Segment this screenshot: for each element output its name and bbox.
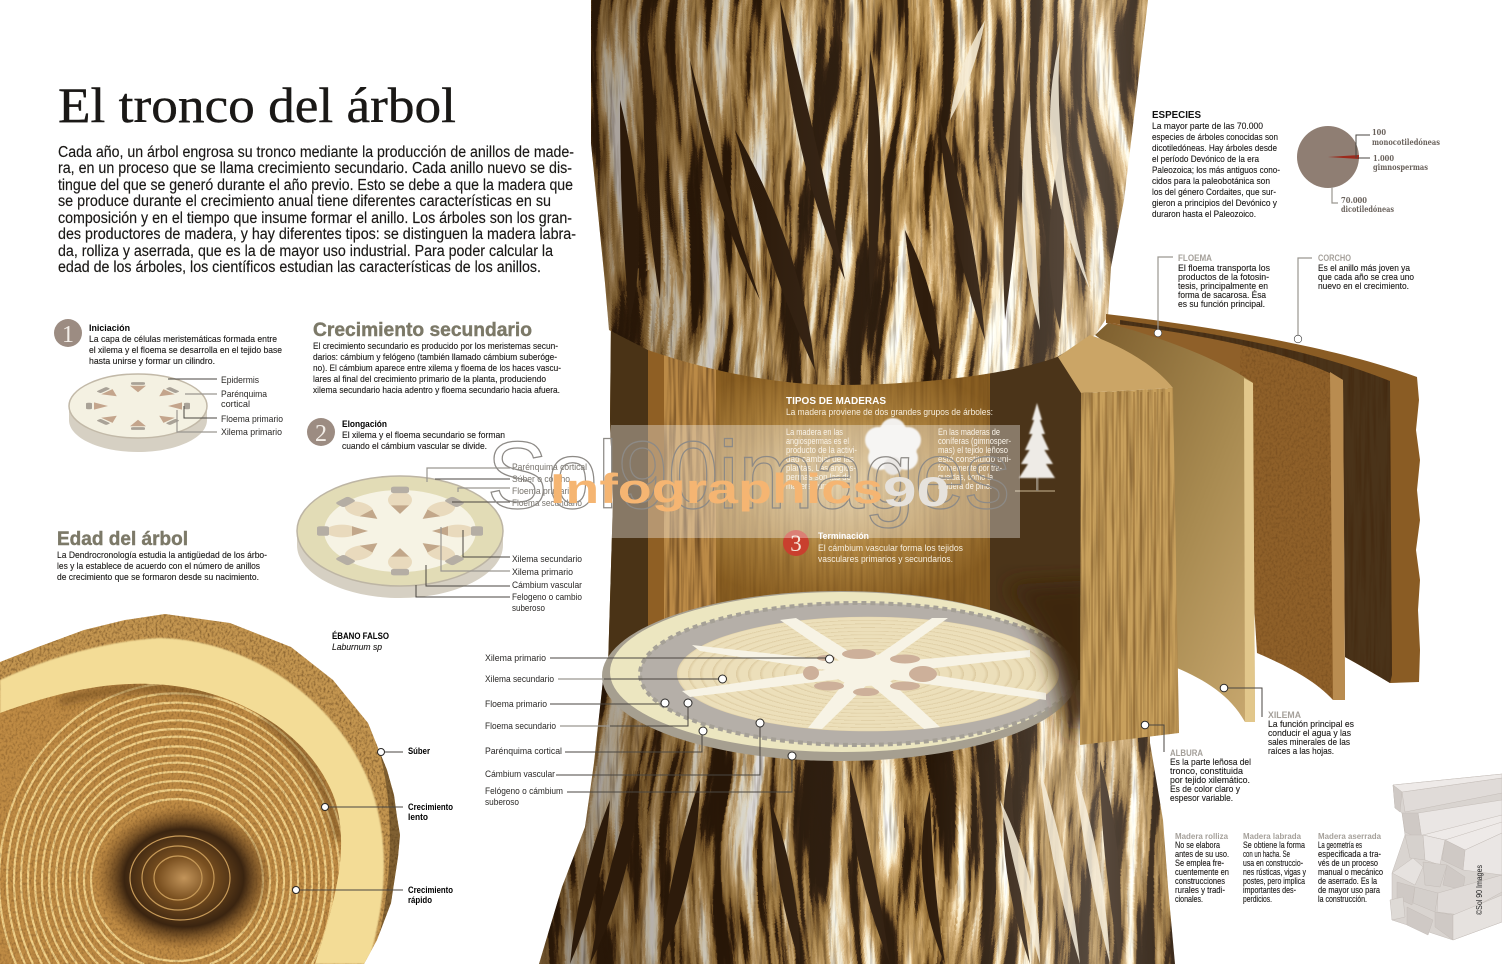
madera aserrada: de aserrado. Es la (1318, 876, 1377, 886)
callout: cámbium vascular (485, 719, 764, 780)
body text: El crecimiento secundario es producido por los meristemas secun- (313, 341, 558, 352)
callout: floema: es su función principal. (1178, 299, 1265, 310)
body text: de crecimiento que se formaron desde su nacimiento. (57, 572, 259, 583)
body text: La Dendrocronología estudia la antigüedad de los árbo- (57, 550, 267, 561)
callout: felógeno: Felógeno o cámbium (485, 786, 563, 797)
callout: albura: ALBURA (1170, 748, 1203, 759)
pie chart: gimnospermas (1373, 163, 1428, 173)
madera aserrada: especificada a tra- (1318, 849, 1381, 859)
callout: súber (378, 746, 430, 756)
madera rolliza: rurales y tradi- (1175, 885, 1225, 895)
label: ébano falso: Laburnum sp (332, 642, 382, 653)
step 3 text: Terminación (818, 531, 869, 541)
callout: albura (1141, 721, 1251, 804)
labels disc 2: suberoso (512, 603, 545, 614)
pie chart: 70.000 (1341, 196, 1367, 206)
label: ébano falso: ÉBANO FALSO (332, 631, 389, 641)
icon: timber stack (1390, 774, 1502, 940)
cut wall of trunk (608, 330, 1090, 680)
body text: Paleozoica; los más antiguos cono- (1152, 165, 1280, 176)
labels disc 1: Parénquima (221, 389, 268, 400)
angiospermas text (786, 427, 857, 491)
heading: Crecimiento secundario (313, 320, 532, 341)
callout: albura: por tejido xilemático. (1170, 775, 1250, 786)
labels disc 1: Epidermis (221, 375, 259, 386)
step 2 text: El xilema y el floema secundario se forman (342, 430, 505, 441)
body text (1152, 121, 1280, 220)
madera rolliza: Se emplea fre- (1175, 858, 1224, 868)
section: edad del árbol (57, 529, 267, 583)
diagram: disc 2 (297, 476, 503, 598)
callout: xilema: XILEMA (1268, 710, 1301, 721)
floema layer (1108, 323, 1345, 700)
coníferas text: formemente por tra- (938, 463, 1002, 473)
xilema layer (1095, 323, 1255, 722)
especies block (1152, 109, 1440, 220)
callout: xilema secundario (485, 674, 726, 685)
madera rolliza: construcciones (1175, 876, 1226, 886)
number badge 1: 1 (62, 322, 74, 348)
step 2: elongación (297, 418, 587, 614)
heartwood (96, 806, 272, 950)
callout: floema primario (485, 699, 669, 710)
callout: xilema: raíces a las hojas. (1268, 746, 1334, 757)
pie chart: dicotiledóneas (1341, 204, 1394, 215)
callout: floema: tesis, principalmente en (1178, 281, 1268, 292)
watermark: sol 90 images: Sol90images (487, 422, 1010, 529)
madera labrada: Madera labrada (1243, 831, 1301, 841)
madera aserrada: la construcción. (1318, 894, 1367, 904)
madera rolliza: antes de su uso. (1175, 849, 1229, 859)
intro text: da, rolliza y aserrada, que es la de mayor uso industrial. Para poder calcular la (58, 243, 553, 260)
watermark: infographics: Infographics (550, 465, 883, 512)
angiospermas text: angiospermas es el (786, 436, 849, 446)
labels disc 2: Xilema secundario (512, 554, 582, 565)
body text: xilema secundario hacia adentro y floema secundario hacia afuera. (313, 385, 560, 396)
copyright: ©Sol 90 Images (1474, 865, 1484, 915)
intro text (58, 144, 576, 276)
albura layer (1058, 335, 1180, 750)
label: ébano falso (332, 631, 389, 653)
madera labrada: perdicios. (1243, 894, 1272, 904)
callout: xilema (1220, 684, 1354, 757)
madera aserrada: vés de un proceso (1318, 858, 1378, 868)
heading: ESPECIES (1152, 109, 1201, 121)
madera aserrada: de mayor uso para (1318, 885, 1380, 895)
coníferas text: madera de pino. (938, 481, 992, 491)
leader lines of main disc (485, 653, 834, 808)
angiospermas text: La madera en las (786, 427, 843, 437)
body text: lares al final del crecimiento primario de la planta, produciendo (313, 374, 546, 385)
labels disc 2: Súber o corcho (512, 474, 570, 485)
callout: corcho: nuevo en el crecimiento. (1318, 281, 1409, 292)
step 3 text (818, 531, 963, 565)
callout: corcho (1294, 253, 1414, 343)
intro text: tingue del que se generó durante el año previo. Esto se debe a que la madera que (58, 177, 573, 194)
body text: les y la establece de acuerdo con el número de anillos (57, 561, 260, 572)
labels disc 2: Parénquima cortical (512, 462, 587, 473)
callout: floema: El floema transporta los (1178, 263, 1270, 274)
diagram: disc 1 (69, 374, 207, 452)
callout: floema: FLOEMA (1178, 253, 1212, 264)
madera labrada (1243, 831, 1306, 904)
body text: La mayor parte de las 70.000 (1152, 121, 1263, 132)
madera labrada: con un hacha. Se (1243, 849, 1290, 859)
body text: no). El cámbium aparece entre xilema y floema de los haces vascu- (313, 363, 561, 374)
labels disc 2: Xilema primario (512, 567, 573, 578)
step 1 text (89, 323, 282, 367)
sapwood band (0, 638, 384, 964)
body text: gieron a principios del Devónico y (1152, 198, 1277, 209)
callout: corcho: que cada año se crea uno (1318, 272, 1414, 283)
madera labrada: Se obtiene la forma (1243, 840, 1305, 850)
section: crecimiento secundario (313, 320, 561, 396)
body text: dicotiledóneas. Hay árboles desde (1152, 143, 1277, 154)
angiospermas text: madera dura. (786, 481, 831, 491)
watermark: white 90: 90 (883, 468, 950, 515)
tree trunk bark (530, 0, 1190, 964)
body text: darios: cámbium y felógeno (también llamado cámbium suberóge- (313, 352, 557, 363)
callout: felógeno (485, 752, 796, 808)
step 2 text (342, 419, 505, 452)
step 1 text: La capa de células meristemáticas formada entre (89, 334, 277, 345)
vascular ring (640, 603, 1076, 745)
coníferas text: coníferas (gimnosper- (938, 436, 1011, 446)
step 1 text: el xilema y el floema se desarrolla en el tejido base (89, 345, 282, 356)
madera labrada: importantes des- (1243, 885, 1296, 895)
step 3 text: vasculares primarios y secundarios. (818, 554, 953, 565)
body text: cidos para la paleobotánica son (1152, 176, 1270, 187)
tipos de maderas panel (783, 395, 1055, 565)
coníferas text (938, 427, 1011, 491)
callout: felógeno: suberoso (485, 797, 519, 808)
callout: cámbium vascular: Cámbium vascular (485, 769, 555, 780)
step 1 text: Iniciación (89, 323, 130, 333)
pie chart: 100 (1372, 128, 1386, 138)
callout: albura: Es la parte leñosa del (1170, 757, 1251, 768)
disc outer rim (602, 591, 1078, 761)
stump cross-section (0, 610, 402, 964)
callout: albura: tronco, constituida (1170, 766, 1244, 777)
callout: xilema: conducir el agua y las (1268, 728, 1351, 739)
angiospermas text: producto de la activi- (786, 445, 857, 455)
callout: floema: productos de la fotosin- (1178, 272, 1269, 283)
madera aserrada: La geometría es (1318, 840, 1362, 850)
callout: floema: forma de sacarosa. Ésa (1178, 290, 1267, 301)
madera labrada: nes rústicas, vigas y (1243, 867, 1306, 877)
pie chart: monocotiledóneas (1372, 137, 1440, 148)
callout: xilema: La función principal es (1268, 719, 1354, 730)
callout: xilema: sales minerales de las (1268, 737, 1350, 748)
intro text: composición y en el tiempo que insume formar el anillo. Los árboles son los gran- (58, 210, 572, 227)
callout: xilema primario: Xilema primario (485, 653, 546, 664)
step 3 text: El cámbium vascular forma los tejidos (818, 543, 963, 554)
coníferas text: En las maderas de (938, 427, 1000, 437)
heading: TIPOS DE MADERAS (786, 395, 886, 407)
growth rings (0, 680, 355, 964)
labels disc 1 (221, 375, 283, 438)
coníferas text: está constituido uni- (938, 454, 1011, 464)
callout: albura: espesor variable. (1170, 793, 1233, 804)
rays (682, 618, 1046, 729)
madera rolliza (1175, 831, 1229, 904)
shadow of the right side (1005, 580, 1095, 732)
pie chart (1297, 126, 1440, 215)
body text (313, 341, 561, 396)
xylem with rings (677, 617, 1059, 731)
callout: crecimiento rápido: rápido (408, 895, 432, 905)
callout: súber: Súber (408, 746, 430, 756)
icon: broadleaf tree (865, 418, 921, 475)
watermark panel (611, 425, 1020, 538)
subheading: La madera proviene de dos grandes grupos de árboles: (786, 407, 993, 418)
madera rolliza: cionales. (1175, 894, 1203, 904)
step 1: iniciación (54, 319, 283, 452)
callout: parénquima cortical (485, 727, 707, 757)
heading: Edad del árbol (57, 529, 188, 550)
callout: crecimiento lento: lento (408, 812, 428, 822)
angiospermas text: plantas. Las angios- (786, 463, 856, 473)
callout: xilema primario (485, 653, 834, 664)
title: El tronco del árbol (58, 77, 456, 133)
number badge 3 (783, 530, 809, 556)
labels disc 1: Xilema primario (221, 427, 282, 438)
callout: xilema secundario: Xilema secundario (485, 674, 554, 685)
parénquima (610, 592, 1074, 752)
madera aserrada: Madera aserrada (1318, 831, 1381, 841)
madera aserrada (1318, 831, 1383, 904)
callout: crecimiento rápido (292, 885, 453, 905)
body text: especies de árboles conocidas son (1152, 132, 1278, 143)
number badge 2: 2 (315, 421, 327, 447)
callout: floema primario: Floema primario (485, 699, 547, 710)
body text: el período Devónico de la era (1152, 154, 1260, 165)
madera rolliza: cuentemente en (1175, 867, 1229, 877)
labels disc 2: Floema primario (512, 486, 574, 497)
body text: duraron hasta el Paleozoico. (1152, 209, 1256, 220)
callout: parénquima cortical: Parénquima cortical (485, 746, 562, 757)
angiospermas text: dad cambial de las (786, 454, 855, 464)
callout: floema (1154, 253, 1270, 337)
body text: los del género Cordaites, que sur- (1152, 187, 1276, 198)
callout: floema secundario (485, 699, 692, 732)
callout: corcho: Es el anillo más joven ya (1318, 263, 1411, 274)
main disc cross-section (602, 580, 1095, 761)
icon: conifer tree (1015, 403, 1055, 491)
angiospermas text: permas son las de (786, 472, 851, 482)
labels disc 2 (512, 462, 587, 614)
madera labrada: postes, pero implica (1243, 876, 1305, 886)
number badge 1 (54, 319, 82, 348)
callout: crecimiento lento (322, 802, 453, 822)
step 2 text: cuando el cámbium vascular se divide. (342, 441, 487, 452)
labels disc 1: Floema primario (221, 414, 283, 425)
intro text: se produce durante el crecimiento anual tiene diferentes características en su (58, 193, 551, 210)
intro text: des productores de madera, y hay diferentes tipos: se distinguen la madera labra- (58, 226, 576, 243)
corcho layer (1106, 314, 1420, 684)
labels disc 2: Floema secundario (512, 498, 582, 509)
step 1 text: hasta unirse y formar un cilindro. (89, 356, 215, 367)
coníferas text: queidas, como la (938, 472, 993, 482)
number badge 2 (307, 418, 335, 447)
madera labrada: usa en construccio- (1243, 858, 1303, 868)
intro text: edad de los árboles, los científicos estudian las características de los anillos. (58, 259, 541, 276)
pie chart: 1.000 (1373, 154, 1394, 164)
callout: crecimiento lento: Crecimiento (408, 802, 453, 812)
callout: floema secundario: Floema secundario (485, 721, 556, 732)
callout: albura: Es de color claro y (1170, 784, 1240, 795)
phloem patches (803, 649, 937, 696)
body text (57, 550, 267, 583)
number badge 3: 3 (790, 531, 802, 556)
labels disc 2: Cámbium vascular (512, 580, 582, 591)
madera rolliza: No se elabora (1175, 840, 1220, 850)
labels disc 2: Felogeno o cambio (512, 592, 582, 603)
intro text: Cada año, un árbol engrosa su tronco mediante la producción de anillos de made- (58, 144, 574, 161)
coníferas text: mas) el tejido leñoso (938, 445, 1008, 455)
madera aserrada: manual o mecánico (1318, 867, 1383, 877)
madera rolliza: Madera rolliza (1175, 831, 1228, 841)
labels disc 1: cortical (221, 399, 250, 410)
step 2 text: Elongación (342, 419, 387, 429)
intro text: ra, en un proceso que se llama crecimiento secundario. Cada anillo nuevo se dis- (58, 160, 572, 177)
callout: crecimiento rápido: Crecimiento (408, 885, 453, 895)
callout: corcho: CORCHO (1318, 253, 1351, 264)
